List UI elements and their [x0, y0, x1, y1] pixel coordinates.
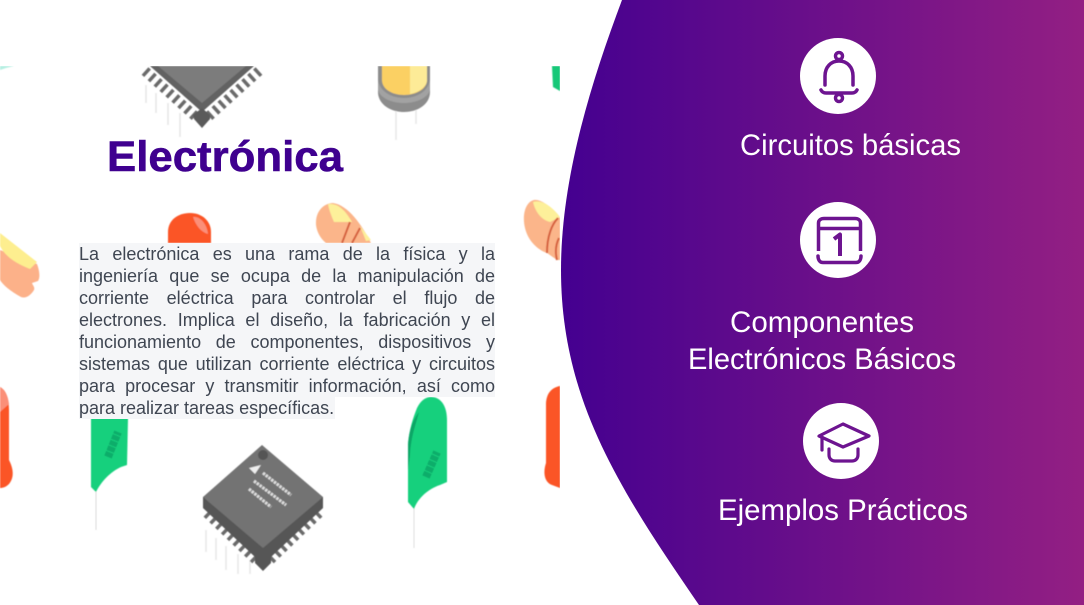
text block: description: electrones. Implica el diseño, la fabricación y el	[79, 310, 495, 330]
text block: description: La electrónica es una rama de la física y la	[79, 244, 495, 264]
text block: description: ingeniería que se ocupa de la manipulación de	[79, 266, 495, 286]
icon: graduation cap	[803, 403, 879, 479]
label: componentes: Electrónicos Básicos	[688, 343, 956, 376]
label: componentes: Componentes	[730, 306, 914, 339]
icon: bottom chip	[203, 445, 323, 574]
text block: description: para procesar y transmitir información, así como	[79, 376, 495, 396]
label: componentes	[688, 306, 956, 376]
icon: red LED	[168, 213, 211, 243]
icon: calendar	[800, 202, 876, 278]
icon: green capacitor top right	[552, 66, 560, 91]
icon: red LED right	[544, 386, 560, 488]
icon: green capacitor right	[408, 397, 447, 548]
label: ejemplos: Ejemplos Prácticos	[718, 494, 968, 527]
panel: purple gradient curve	[561, 0, 1084, 605]
text block: description: para realizar tareas específicas.	[79, 398, 334, 418]
text block: description: funcionamiento de componentes, dispositivos y	[79, 332, 495, 352]
icon: peach resistor right	[524, 200, 560, 260]
icon: cyan fragment	[0, 66, 14, 70]
text block: description	[79, 243, 495, 419]
electronic components background	[0, 66, 560, 574]
icon: bell	[800, 38, 876, 114]
icon: green capacitor left	[91, 418, 128, 530]
text block: description: corriente eléctrica para controlar el flujo de	[79, 288, 495, 308]
text block: description: sistemas que utilizan corriente eléctrica y circuitos	[79, 354, 495, 374]
icon: red LED left	[0, 387, 13, 488]
label: circuitos: Circuitos básicas	[740, 129, 961, 162]
icon: top chip	[145, 66, 259, 137]
icon: peach resistor centre	[316, 203, 371, 243]
icon: peach resistor left	[0, 233, 39, 298]
title: Electrónica	[107, 133, 344, 181]
icon: yellow LED	[378, 66, 430, 140]
